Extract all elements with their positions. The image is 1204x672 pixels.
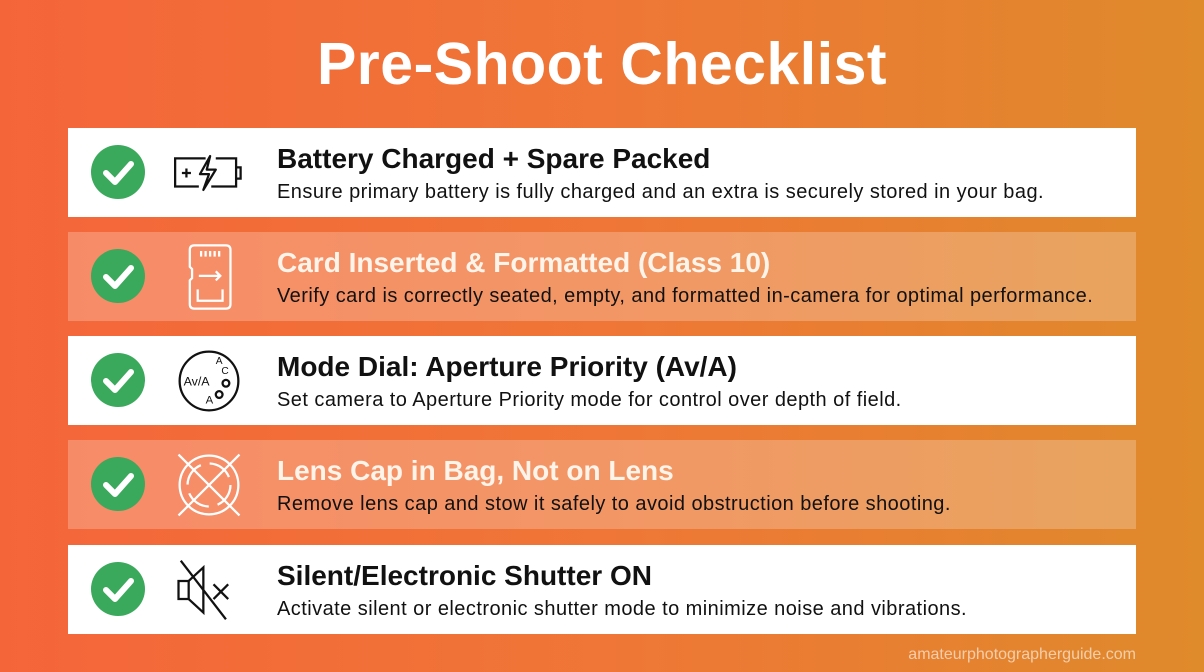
- icon: lens cap crossed: [178, 454, 240, 516]
- description: Set camera to Aperture Priority mode for control over depth of field.: [277, 389, 902, 411]
- description: Activate silent or electronic shutter mode to minimize noise and vibrations.: [277, 598, 967, 620]
- row 1: battery: [68, 128, 1136, 217]
- row 3: mode dial: [68, 336, 1136, 425]
- icon: mode dial: A: [206, 395, 214, 407]
- row 4: lens cap: [68, 440, 1136, 529]
- icon: battery: [174, 154, 242, 192]
- title: Pre-Shoot Checklist: [317, 31, 887, 97]
- heading: Battery Charged + Spare Packed: [277, 143, 710, 174]
- row 5: silent shutter: [68, 545, 1136, 634]
- icon: check: [91, 457, 145, 511]
- icon: mode dial: Av/A: [184, 375, 210, 389]
- icon: mode dial: A: [216, 356, 223, 367]
- description: Remove lens cap and stow it safely to avoid obstruction before shooting.: [277, 493, 951, 515]
- heading: Card Inserted & Formatted (Class 10): [277, 247, 770, 278]
- icon: memory card: [188, 244, 232, 310]
- icon: check: [91, 249, 145, 303]
- heading: Silent/Electronic Shutter ON: [277, 560, 652, 591]
- icon: mode dial: [178, 350, 240, 412]
- icon: check: [91, 562, 145, 616]
- icon: muted speaker: [177, 560, 229, 620]
- heading: Mode Dial: Aperture Priority (Av/A): [277, 351, 737, 382]
- row 2: card: [68, 232, 1136, 321]
- icon: check: [91, 353, 145, 407]
- icon: check: [91, 145, 145, 199]
- description: Ensure primary battery is fully charged and an extra is securely stored in your bag.: [277, 181, 1044, 203]
- footer watermark: amateurphotographerguide.com: [908, 646, 1136, 663]
- heading: Lens Cap in Bag, Not on Lens: [277, 455, 674, 486]
- description: Verify card is correctly seated, empty, and formatted in-camera for optimal performance.: [277, 285, 1093, 307]
- icon: mode dial: C: [221, 366, 229, 377]
